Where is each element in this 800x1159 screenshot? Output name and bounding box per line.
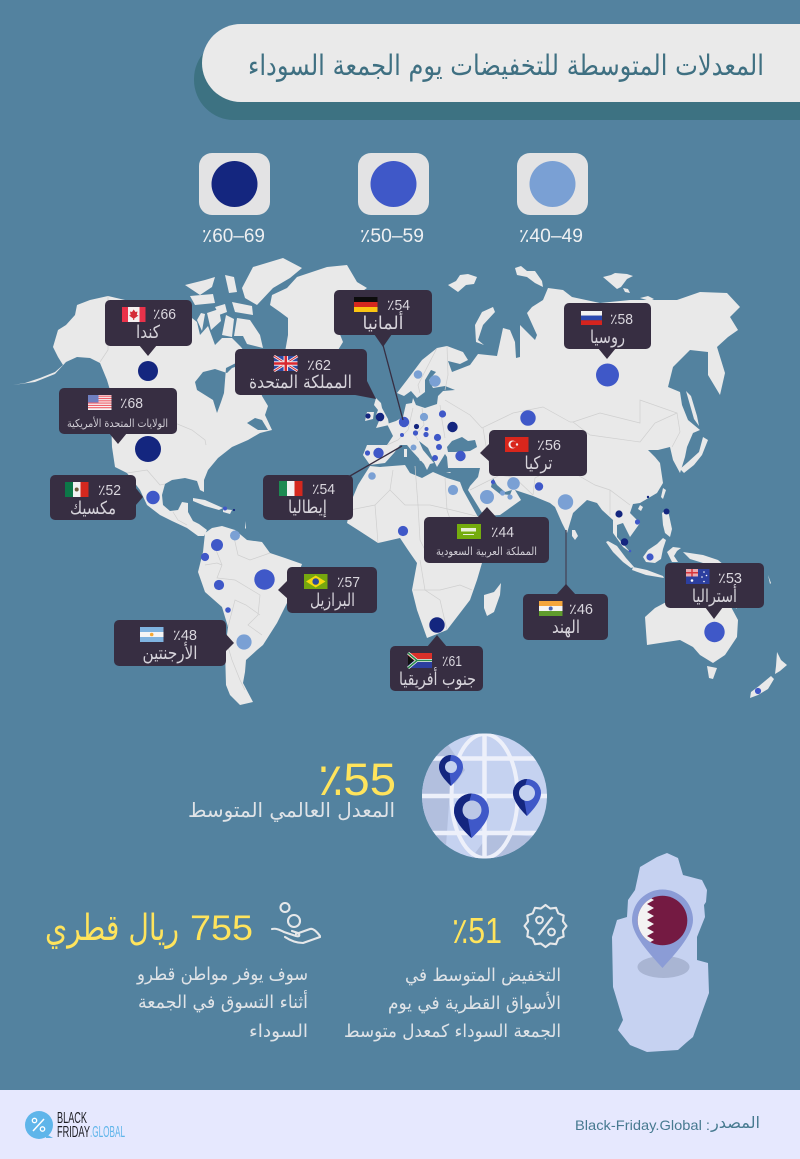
discount description	[344, 965, 561, 1042]
label: Italy: إيطاليا	[288, 497, 327, 518]
label: Turkey	[480, 430, 587, 476]
dark dots (60-69%)	[135, 361, 670, 633]
Hudson Bay	[195, 362, 250, 413]
savings description: أثناء التسوق في الجمعة	[138, 990, 308, 1013]
discount description: الجمعة السوداء كمعدل متوسط	[344, 1021, 561, 1042]
savings description: السوداء	[249, 1021, 308, 1042]
label: United Kingdom	[235, 349, 376, 399]
label: Turkey: تركيا	[524, 453, 552, 474]
label: Germany	[334, 290, 432, 420]
label: Brazil	[278, 567, 377, 613]
Great Britain	[374, 398, 389, 428]
label: India	[523, 530, 608, 640]
flag: Italy	[279, 481, 302, 496]
source	[575, 1113, 760, 1133]
flag: India	[539, 601, 562, 616]
light dots (40-49%)	[230, 370, 573, 650]
label: South Africa	[390, 635, 483, 691]
label: United States	[59, 388, 177, 444]
Greenland	[270, 265, 367, 355]
flag: Saudi Arabia	[457, 524, 481, 539]
label: Italy: ٪54	[312, 482, 335, 498]
label: Mexico	[50, 475, 143, 520]
flag: Argentina	[140, 627, 164, 642]
source: Black-Friday.Global :	[575, 1117, 710, 1133]
label: Turkey: ٪56	[537, 438, 561, 454]
global average caption: المعدل العالمي المتوسط	[188, 798, 395, 823]
label: Germany: ألمانيا	[362, 311, 404, 334]
label: Russia: ٪58	[610, 312, 633, 328]
source: المصدر	[710, 1113, 760, 1133]
Africa	[347, 465, 510, 638]
savings stat	[45, 903, 320, 1042]
label: Russia: روسيا	[590, 327, 625, 348]
footer band	[0, 1090, 800, 1159]
label: Canada: كندا	[136, 322, 160, 343]
legend item 40-49	[517, 153, 588, 247]
logo wordmark: FRIDAY	[57, 1124, 90, 1141]
flag: Russia	[581, 311, 602, 325]
pin large	[454, 794, 489, 838]
label: Australia: أستراليا	[692, 584, 737, 607]
label: Saudi Arabia: ٪44	[491, 525, 514, 541]
label: Brazil: البرازيل	[310, 590, 355, 611]
Mediterranean islands	[404, 449, 451, 473]
Australia	[645, 590, 738, 663]
flag: UK	[274, 356, 298, 371]
South America	[198, 526, 302, 705]
label: United States: الولايات المتحدة الأمريكية	[67, 416, 168, 430]
pin shadow	[638, 956, 690, 978]
label: India: الهند	[552, 617, 580, 638]
discount description: الأسواق القطرية في يوم	[388, 992, 561, 1014]
Madagascar	[484, 583, 501, 616]
discount description: التخفيض المتوسط في	[405, 965, 561, 986]
medium dots (50-59%)	[146, 364, 761, 694]
label: Australia	[665, 563, 764, 619]
global average text	[188, 754, 396, 823]
title banner	[194, 24, 800, 120]
label: India: ٪46	[569, 602, 593, 618]
banner pill	[202, 24, 800, 102]
discount badge icon	[524, 905, 566, 947]
flag: Turkey	[505, 437, 528, 452]
global average number: ٪55	[318, 754, 396, 805]
Persian Gulf	[491, 478, 512, 495]
legend item 40-49: ٪40–49	[519, 226, 583, 247]
logo wordmark: BLACK	[57, 1110, 87, 1127]
savings description	[136, 964, 308, 1042]
savings description: سوف يوفر مواطن قطرو	[136, 964, 308, 985]
world map	[13, 258, 787, 705]
Arctic Russian islands	[448, 266, 654, 345]
label: Australia: ٪53	[718, 571, 742, 587]
Black Sea	[447, 437, 477, 452]
legend	[199, 153, 588, 247]
logo icon	[25, 1111, 53, 1139]
label: Argentina	[114, 620, 234, 666]
label: United Kingdom: ٪62	[307, 358, 331, 374]
label: United Kingdom: المملكة المتحدة	[249, 372, 352, 393]
label: South Africa: ٪61	[442, 654, 462, 670]
Qatar map with pin	[612, 853, 709, 1052]
legend item 50-59	[358, 153, 429, 247]
label: Brazil: ٪57	[337, 575, 360, 591]
savings amount: ريال قطري	[45, 908, 179, 949]
Sakhalin Kamchatka Japan islands	[638, 391, 708, 511]
location pin	[632, 889, 693, 968]
Southeast Asia islands	[572, 509, 771, 609]
label: United States: ٪68	[120, 396, 143, 412]
New Zealand	[750, 652, 787, 698]
label: Canada	[105, 300, 192, 356]
label: Germany: ٪54	[387, 298, 410, 314]
flag: Mexico	[65, 482, 88, 497]
label: South Africa: جنوب أفريقيا	[399, 667, 476, 690]
Tasmania	[707, 666, 717, 679]
flag: Germany	[354, 297, 378, 312]
legend item 50-59: ٪50–59	[360, 226, 424, 247]
flag: South Africa	[408, 653, 432, 668]
banner shadow	[194, 39, 800, 120]
legend item 60-69	[199, 153, 270, 247]
logo wordmark	[57, 1110, 125, 1141]
label: Canada: ٪66	[153, 307, 176, 323]
flag: Canada	[122, 307, 146, 322]
Qatar discount stat	[344, 905, 566, 1042]
flag: USA	[88, 395, 112, 410]
globe icon with pins	[420, 730, 550, 860]
discount number: ٪51	[452, 910, 502, 951]
label: Russia	[564, 303, 651, 359]
Ireland	[365, 412, 374, 421]
label: Saudi Arabia: المملكة العربية السعودية	[436, 545, 537, 558]
savings amount: 755	[190, 909, 253, 948]
data dots	[135, 361, 761, 694]
hand icon	[272, 903, 320, 943]
logo wordmark: .GLOBAL	[90, 1124, 125, 1141]
logo	[25, 1110, 125, 1141]
Qatar flag circle	[638, 896, 688, 946]
flag: Brazil	[304, 574, 328, 589]
legend item 60-69: ٪60–69	[202, 226, 265, 247]
label: Mexico: ٪52	[98, 483, 121, 499]
Caribbean islands	[193, 498, 246, 529]
Gulf of St Lawrence	[247, 418, 268, 430]
label: Argentina: الأرجنتين	[142, 642, 198, 664]
Canadian Arctic islands	[185, 258, 302, 348]
Eurasia	[363, 288, 740, 552]
flag: Australia	[686, 569, 710, 584]
footer	[0, 1090, 800, 1159]
pin small	[439, 755, 463, 786]
country borders	[100, 296, 680, 690]
label: Saudi Arabia	[424, 507, 549, 563]
label: Italy	[263, 446, 402, 520]
label: Argentina: ٪48	[173, 628, 197, 644]
Qatar silhouette	[612, 853, 709, 1052]
label: Mexico: مكسيك	[70, 498, 116, 519]
North America	[13, 258, 367, 536]
pin right	[513, 779, 541, 816]
